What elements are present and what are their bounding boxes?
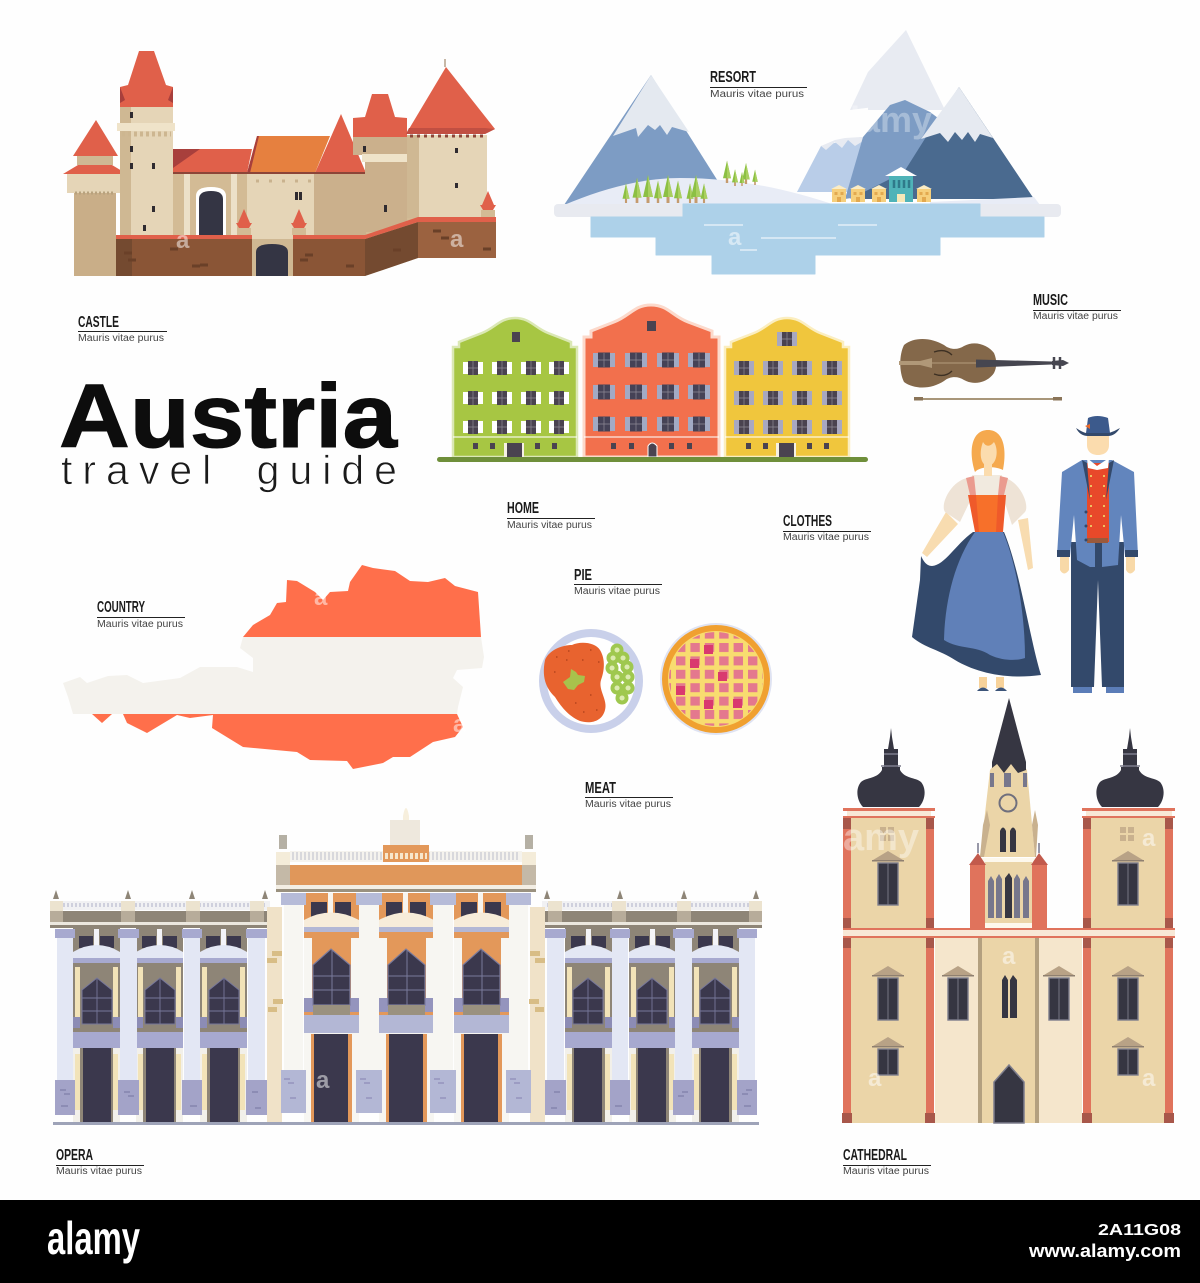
label: opera: OPERA bbox=[56, 1147, 93, 1164]
scattered watermarks: a bbox=[728, 224, 742, 251]
illustration: coloured houses bbox=[437, 305, 868, 462]
illustration: castle bbox=[63, 51, 496, 276]
label: clothes: Mauris vitae purus bbox=[783, 532, 869, 543]
scattered watermarks bbox=[176, 224, 1156, 1094]
label: pie: PIE bbox=[574, 567, 592, 584]
icon: violin and bow bbox=[899, 339, 1069, 400]
food: lattice pie bbox=[660, 623, 772, 735]
food: schnitzel plate bbox=[539, 629, 643, 733]
label: clothes: CLOTHES bbox=[783, 513, 832, 530]
scattered watermarks: a bbox=[314, 584, 328, 611]
label: music: MUSIC bbox=[1033, 292, 1068, 309]
title: Austria travel guide: travel guide bbox=[61, 447, 407, 493]
scattered watermarks: a bbox=[450, 226, 464, 253]
illustration: cathedral bbox=[842, 698, 1175, 1123]
scattered watermarks: a bbox=[176, 227, 190, 254]
label: pie: Mauris vitae purus bbox=[574, 586, 660, 597]
label: opera bbox=[56, 1147, 144, 1177]
label: meat: MEAT bbox=[585, 780, 616, 797]
label: home bbox=[507, 500, 595, 531]
label: cathedral bbox=[843, 1147, 931, 1177]
label: castle: Mauris vitae purus bbox=[78, 333, 164, 344]
label: country bbox=[97, 599, 185, 630]
resort watermark: alamy bbox=[830, 99, 932, 140]
label: cathedral: CATHEDRAL bbox=[843, 1147, 907, 1164]
map: Austria with flag stripes bbox=[63, 565, 484, 769]
label: opera: Mauris vitae purus bbox=[56, 1166, 142, 1177]
label: resort: Mauris vitae purus bbox=[710, 89, 804, 100]
label: clothes bbox=[783, 513, 871, 543]
footer bar: alamy bbox=[47, 1212, 140, 1264]
scattered watermarks: a bbox=[316, 1067, 330, 1094]
scattered watermarks: a bbox=[868, 1065, 882, 1092]
footer bar: www.alamy.com bbox=[1028, 1241, 1181, 1261]
cathedral watermark: amy bbox=[843, 817, 919, 859]
label: meat bbox=[585, 780, 673, 810]
label: country: Mauris vitae purus bbox=[97, 619, 183, 630]
label: meat: Mauris vitae purus bbox=[585, 799, 671, 810]
illustration: woman in dirndl bbox=[912, 430, 1041, 691]
illustration: resort mountains and lake bbox=[554, 30, 1061, 274]
title: Austria travel guide: Austria bbox=[59, 367, 398, 467]
label: country: COUNTRY bbox=[97, 599, 145, 616]
illustration: opera house bbox=[50, 808, 762, 1125]
label: castle bbox=[78, 314, 167, 344]
label: pie bbox=[574, 567, 662, 597]
label: cathedral: Mauris vitae purus bbox=[843, 1166, 929, 1177]
illustration: man in traditional costume bbox=[1057, 416, 1138, 693]
label: home: Mauris vitae purus bbox=[507, 520, 592, 531]
label: home: HOME bbox=[507, 500, 539, 517]
scattered watermarks: a bbox=[1002, 943, 1016, 970]
label: music bbox=[1033, 292, 1121, 322]
label: music: Mauris vitae purus bbox=[1033, 311, 1118, 322]
footer bar: 2A11G08 bbox=[1098, 1222, 1181, 1239]
label: castle: CASTLE bbox=[78, 314, 119, 331]
scattered watermarks: a bbox=[1142, 825, 1156, 852]
label: resort bbox=[710, 69, 807, 100]
label: resort: RESORT bbox=[710, 69, 756, 86]
scattered watermarks: a bbox=[1142, 1065, 1156, 1092]
footer bar bbox=[0, 1200, 1200, 1283]
scattered watermarks: a bbox=[453, 711, 467, 738]
